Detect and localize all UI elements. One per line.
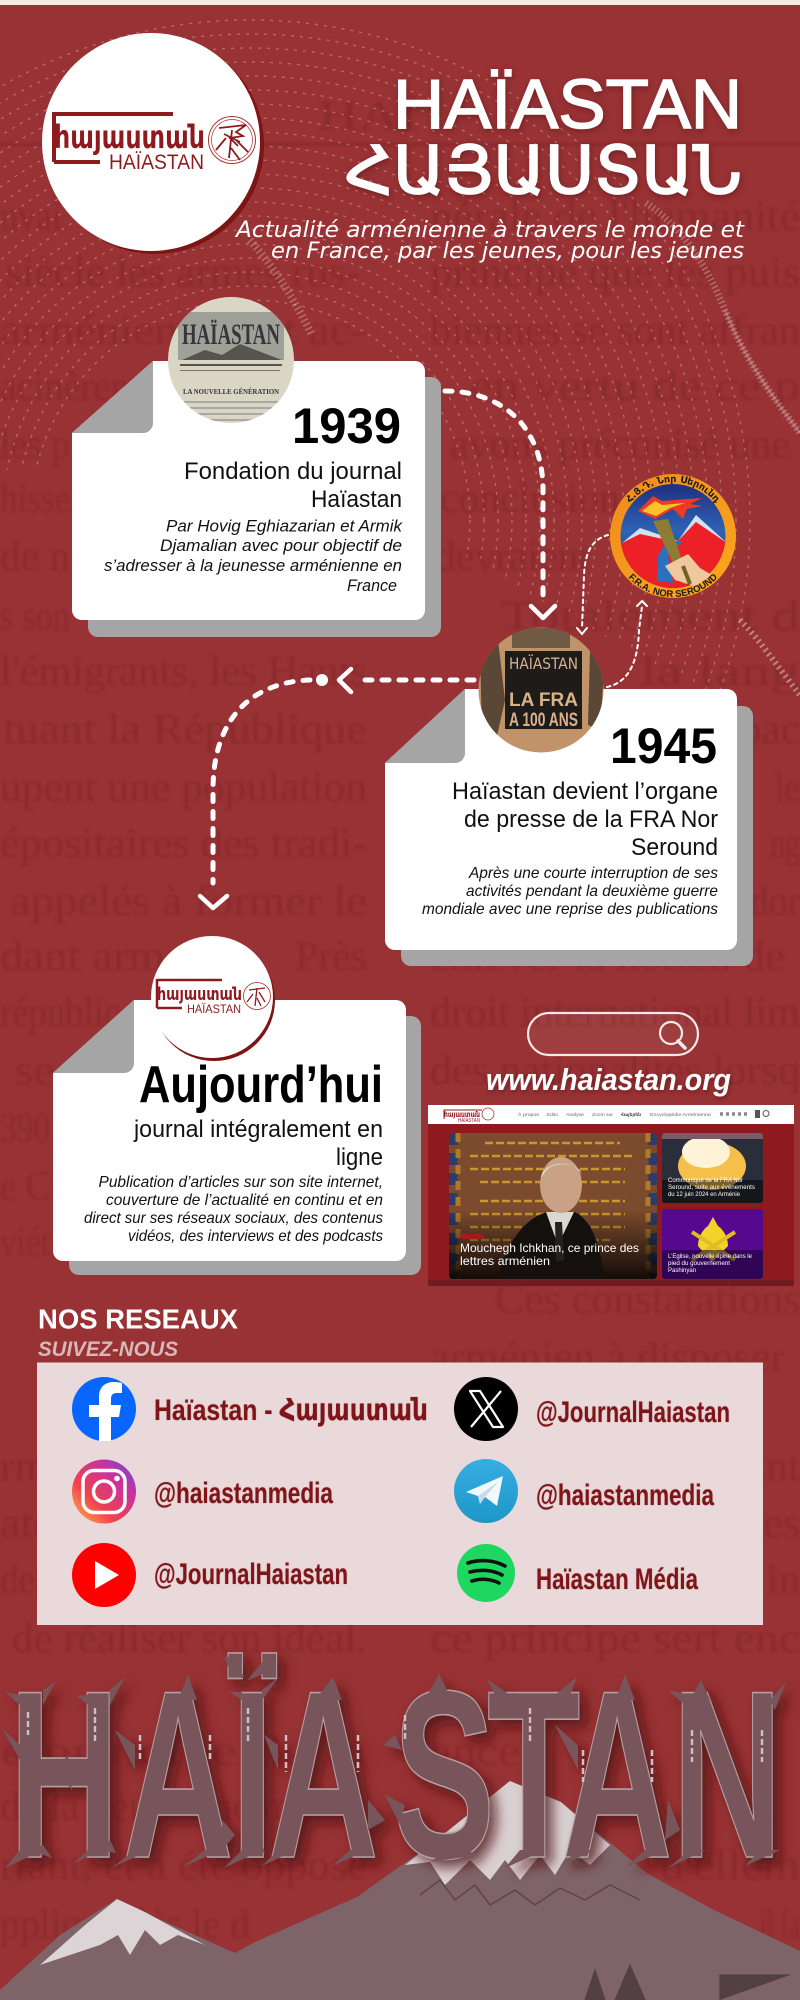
- screenshot: main article: [449, 1133, 657, 1279]
- arrow: 1945 to today: [200, 669, 474, 908]
- logo: main: [42, 33, 264, 254]
- icon: telegram: [454, 1459, 518, 1523]
- background newspaper text: nérale de l'humanité: [430, 194, 800, 240]
- background newspaper text: upent une population: [0, 765, 367, 811]
- screenshot: site header: [444, 1108, 769, 1124]
- background newspaper text: dant arm: [0, 934, 165, 980]
- background newspaper text: ance: [430, 1729, 520, 1775]
- screenshot: site header: Zoom sur: [592, 1112, 614, 1117]
- background newspaper text: droit international lim: [430, 990, 800, 1036]
- background newspaper text: tuant la République: [3, 707, 367, 753]
- arrow: badge to 1945: [577, 535, 608, 634]
- screenshot: article 2: Communiqué de la FRA Nor: [668, 1178, 743, 1184]
- screenshot: site header: HAÏASTAN: [458, 1117, 480, 1124]
- background newspaper text: pac: [740, 707, 800, 753]
- screenshot: main article title: lettres arménien: [460, 1254, 550, 1268]
- background newspaper text: Près: [295, 934, 367, 980]
- icon: youtube: [72, 1543, 136, 1607]
- photo: La FRA a 100 ans: HAÏASTAN: [509, 654, 578, 673]
- heading: foundation: Haïastan: [311, 486, 402, 513]
- photo: 1939 front page: HAÏASTAN: [182, 318, 280, 351]
- arrow: 1939 to 1945: [445, 391, 555, 618]
- website screenshot: [428, 1105, 794, 1286]
- title: ՀԱՅԱՍՏԱՆ: [345, 132, 742, 209]
- screenshot: article 3: L’Eglise, nouvelle épine dans le: [668, 1254, 753, 1260]
- label: youtube: @JournalHaiastan: [154, 1558, 348, 1591]
- background newspaper text: pplique dès le d: [0, 1902, 250, 1948]
- background newspaper text: de n: [0, 534, 70, 580]
- icon: FRA Nor Seround badge: Հ.Յ.Դ. Նոր Սերունդ: [626, 476, 718, 504]
- screenshot: main article title: [460, 1234, 639, 1268]
- background newspaper text: des nationalités lorsq: [430, 1048, 800, 1094]
- lettering: spikes: [2, 1657, 786, 1868]
- icon: FRA Nor Seround badge: [610, 474, 736, 598]
- text: foundation details: France: [347, 576, 397, 595]
- title: [345, 65, 742, 209]
- background newspaper text: ater le droit du peu-: [0, 1501, 367, 1547]
- photo: 1939 front page: [165, 295, 295, 425]
- background newspaper text: Ces constatations: [495, 1277, 800, 1323]
- text: foundation details: Djamalian avec pour objectif de: [160, 536, 402, 555]
- screenshot: article 2: du 12 juin 2024 en Arménie: [668, 1192, 741, 1198]
- logo: main: հայաստան: [54, 118, 205, 156]
- background newspaper text: les p: [0, 422, 70, 468]
- background newspaper text: hisse: [0, 476, 70, 522]
- background newspaper text: appelés à former le: [10, 879, 367, 925]
- lettering: highlights: [28, 1708, 762, 1782]
- background newspaper text: acinèrent: [0, 364, 140, 410]
- background newspaper text: épositaires des tradi-: [0, 821, 367, 867]
- heading: party organ: Seround: [631, 834, 718, 861]
- background newspaper text: ce principe sert enc: [430, 1616, 800, 1662]
- logo: main: HAÏASTAN: [109, 151, 204, 174]
- year: 1939: 1939: [292, 398, 401, 454]
- label: instagram: @haiastanmedia: [154, 1477, 333, 1510]
- heading: Aujourd'hui: Aujourd’hui: [139, 1056, 383, 1114]
- background newspaper text: biennes se sont affran: [430, 308, 800, 354]
- text: online details: couverture de l’actualité en continu et en: [106, 1192, 383, 1209]
- text: online journal: ligne: [336, 1144, 383, 1171]
- background newspaper text: 390: [0, 1106, 50, 1152]
- panel: 1945: [385, 625, 753, 966]
- text: online details: [84, 1174, 383, 1245]
- text: party organ details: Après une courte interruption de ses: [468, 865, 718, 882]
- text: foundation details: [104, 516, 404, 595]
- background newspaper text: républic: [0, 990, 120, 1036]
- label: spotify: Haïastan Média: [536, 1563, 698, 1596]
- screenshot: article 3: [662, 1209, 763, 1279]
- subtitle: en France, par les jeunes, pour les jeunes: [271, 239, 744, 264]
- top cream band: [0, 0, 800, 5]
- background newspaper text: avons préconisé une: [450, 422, 790, 468]
- heading: party organ: Haïastan devient l’organe: [452, 778, 718, 805]
- icon: X: [454, 1377, 518, 1441]
- background newspaper text: devraient: [435, 534, 590, 580]
- screenshot: site header: Analyse: [566, 1112, 585, 1117]
- heading: foundation: Fondation du journal: [184, 458, 402, 485]
- subtitle: [234, 218, 745, 264]
- icon: instagram: [72, 1460, 136, 1524]
- icon: spotify: [457, 1544, 515, 1602]
- background newspaper text: viét: [0, 1220, 50, 1266]
- background newspaper text: e principe de la: [0, 1729, 368, 1775]
- icon: FRA Nor Seround badge: F.R.A. NOR SEROUND: [628, 573, 716, 598]
- arrow: 1945 to badge: [607, 601, 647, 687]
- panel: social networks: [37, 1362, 763, 1625]
- text: party organ details: activités pendant la deuxième guerre: [466, 883, 718, 900]
- screenshot: site header: À propos: [518, 1111, 540, 1117]
- heading: networks: [38, 1304, 238, 1361]
- background newspaper text: Totalement d: [500, 594, 800, 640]
- background newspaper text: nvai: [0, 194, 62, 240]
- screenshot: main article title: Mouchegh Ichkhan, ce prince des: [460, 1241, 639, 1255]
- panel: 1939: [72, 295, 441, 637]
- heading: party organ: de presse de la FRA Nor: [464, 806, 718, 833]
- title: HAÏASTAN: [393, 65, 742, 143]
- screenshot: article 2: [662, 1133, 763, 1203]
- photo: La FRA a 100 ans: LA FRA: [509, 690, 578, 711]
- text: party organ details: [422, 865, 718, 918]
- background newspaper text: HAÏ: [318, 94, 418, 140]
- background newspaper text: l'émigrants, les Hauts: [0, 649, 367, 695]
- background newspaper text: d'ellem: [660, 1843, 800, 1889]
- background newspaper text: rtant, et a été opposé: [0, 1843, 367, 1889]
- background newspaper text: se: [15, 1048, 55, 1094]
- photo: 1939 front page: LA NOUVELLE GÉNÉRATION: [183, 386, 280, 396]
- subtitle: Actualité arménienne à travers le monde et: [234, 218, 745, 243]
- photo: La FRA a 100 ans: A 100 ANS: [509, 710, 578, 731]
- text: online details: direct sur ses réseaux sociaux, des contenus: [84, 1210, 383, 1227]
- heading: foundation: [184, 458, 402, 513]
- screenshot: article 3: Pashinyan: [668, 1268, 696, 1274]
- text: party organ details: mondiale avec une reprise des publications: [422, 901, 718, 918]
- dotted wave pattern: [0, 19, 751, 689]
- panel: today: [53, 936, 421, 1275]
- text: foundation details: Par Hovig Eghiazarian et Armik: [166, 516, 404, 536]
- background newspaper text: ser d'eux-mêmes, les: [430, 1501, 800, 1547]
- screenshot: site header: Հայերեն: [621, 1112, 641, 1118]
- screenshot: article 3: pied du gouvernement: [668, 1261, 730, 1267]
- background newspaper text: rmén: [0, 1444, 90, 1490]
- screenshot: article 2: Seround, suite aux événements: [668, 1185, 755, 1191]
- background newspaper text: jouir de leur liberté in: [428, 1557, 800, 1603]
- label: telegram: @haiastanmedia: [536, 1479, 714, 1512]
- logo: small: [151, 936, 275, 1061]
- background newspaper text: arménien à disposer: [430, 1335, 785, 1381]
- background newspaper text: en vertu de ce p: [470, 364, 800, 410]
- background newspaper text: la lang: [640, 649, 800, 695]
- screenshot: site header: հայաստան: [444, 1110, 480, 1119]
- background newspaper text: enlever la notion de: [430, 934, 785, 980]
- background newspaper text: s son: [0, 594, 70, 640]
- text: foundation details: s’adresser à la jeunesse arménienne en: [104, 556, 402, 575]
- background newspaper text: conclusion: [440, 476, 620, 522]
- background newspaper text: sous son as-: [150, 1444, 367, 1490]
- background newspaper text: arménienne ont ac-: [0, 308, 367, 354]
- illustration: mountains: [0, 1781, 800, 2000]
- photo: La FRA a 100 ans: [478, 628, 604, 752]
- heading: networks: NOS RESEAUX: [38, 1304, 238, 1334]
- background newspaper text: de réaliser son idéal.: [12, 1616, 367, 1662]
- bright dotted band: [250, 203, 800, 695]
- year: 1945: 1945: [610, 718, 717, 774]
- text: online journal: [133, 1116, 383, 1171]
- background newspaper text: siècle les armes rus-: [5, 250, 360, 296]
- background newspaper text: de principe affirmant: [430, 1444, 800, 1490]
- label: facebook: Haïastan - Հայաստան: [154, 1394, 428, 1427]
- screenshot: site header: Encyclopédie Arménienne: [650, 1112, 712, 1117]
- background newspaper text: de la deuxième moitié: [0, 1784, 367, 1830]
- heading: party organ: [452, 778, 718, 861]
- logo: small: հայաստան: [157, 984, 242, 1005]
- background newspaper text: des peuples oppresseurs,: [0, 1557, 367, 1603]
- text: online journal: journal intégralement en: [133, 1116, 383, 1143]
- background newspaper text: principe que les puis: [430, 250, 800, 296]
- illustration: Haïastan lettering: HAÏASTAN: [9, 1640, 782, 1908]
- website url: www.haiastan.org: [486, 1062, 731, 1097]
- text: online details: Publication d’articles sur son site internet,: [98, 1174, 383, 1191]
- search box icon: [528, 1013, 698, 1055]
- heading: networks: SUIVEZ-NOUS: [38, 1338, 178, 1361]
- logo: small: HAÏASTAN: [187, 1002, 241, 1016]
- label: X: @JournalHaiastan: [536, 1396, 730, 1429]
- text: online details: vidéos, des interviews et des podcasts: [128, 1228, 383, 1245]
- screenshot: site header: Edito: [547, 1112, 559, 1117]
- icon: facebook: [72, 1377, 136, 1441]
- background newspaper text: e C: [0, 1164, 50, 1210]
